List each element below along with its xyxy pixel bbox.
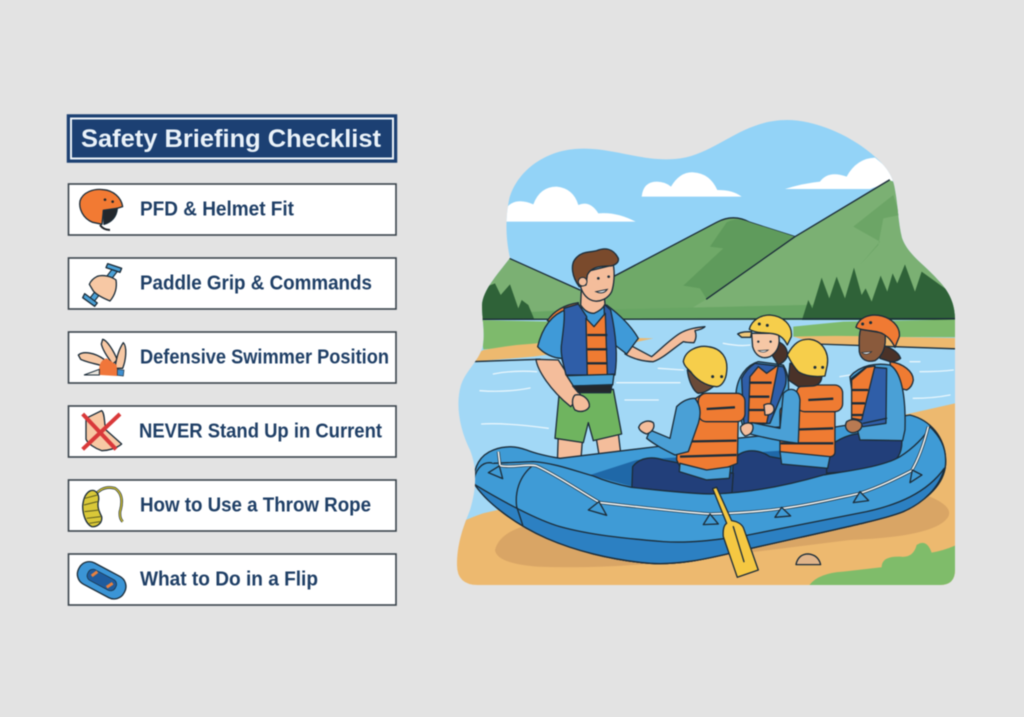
river, shore and sand (443, 249, 970, 597)
checklist item: defensive swimmer position: Defensive Swimmer Position (140, 346, 389, 368)
icon: raft from above (73, 558, 130, 603)
illustration: raft safety briefing scene (443, 115, 970, 597)
checklist item: defensive swimmer position (68, 332, 396, 383)
checklist item: what to do in a flip (68, 554, 396, 605)
far passenger with yellow helmet (736, 315, 791, 430)
raft hull (474, 415, 946, 564)
checklist item: PFD and helmet fit (68, 184, 396, 235)
raft floor (591, 450, 780, 486)
raft safety rope with D-rings (488, 427, 928, 525)
title: Safety Briefing Checklist (81, 125, 382, 153)
mountains and clouds (470, 158, 970, 323)
right passenger with orange helmet (823, 315, 913, 473)
checklist item: paddle grip and commands: Paddle Grip & Commands (140, 272, 372, 294)
instructor (536, 249, 705, 463)
raft front tube (474, 427, 946, 564)
middle passenger with yellow helmet (732, 339, 843, 493)
checklist item: PFD and helmet fit: PFD & Helmet Fit (140, 198, 294, 220)
checklist item: throw rope: How to Use a Throw Rope (140, 494, 371, 516)
checklist item: never stand up in current (68, 406, 396, 457)
icon: crossed out standing foot (83, 411, 122, 451)
sky (506, 120, 894, 290)
checklist item: throw rope (68, 480, 396, 531)
paddle (713, 487, 758, 577)
front passenger with yellow helmet (632, 346, 745, 497)
checklist item: what to do in a flip: What to Do in a Flip (140, 568, 318, 590)
title (68, 115, 396, 162)
checklist item: never stand up in current: NEVER Stand Up in Current (139, 420, 382, 442)
icon: swimmer on back (78, 339, 126, 376)
rock (796, 554, 821, 565)
icon: helmet (80, 189, 123, 230)
checklist item: paddle grip and commands (68, 258, 396, 309)
icon: coiled throw rope (83, 487, 123, 527)
grass patch (809, 542, 956, 586)
icon: hand gripping paddle (83, 264, 122, 306)
